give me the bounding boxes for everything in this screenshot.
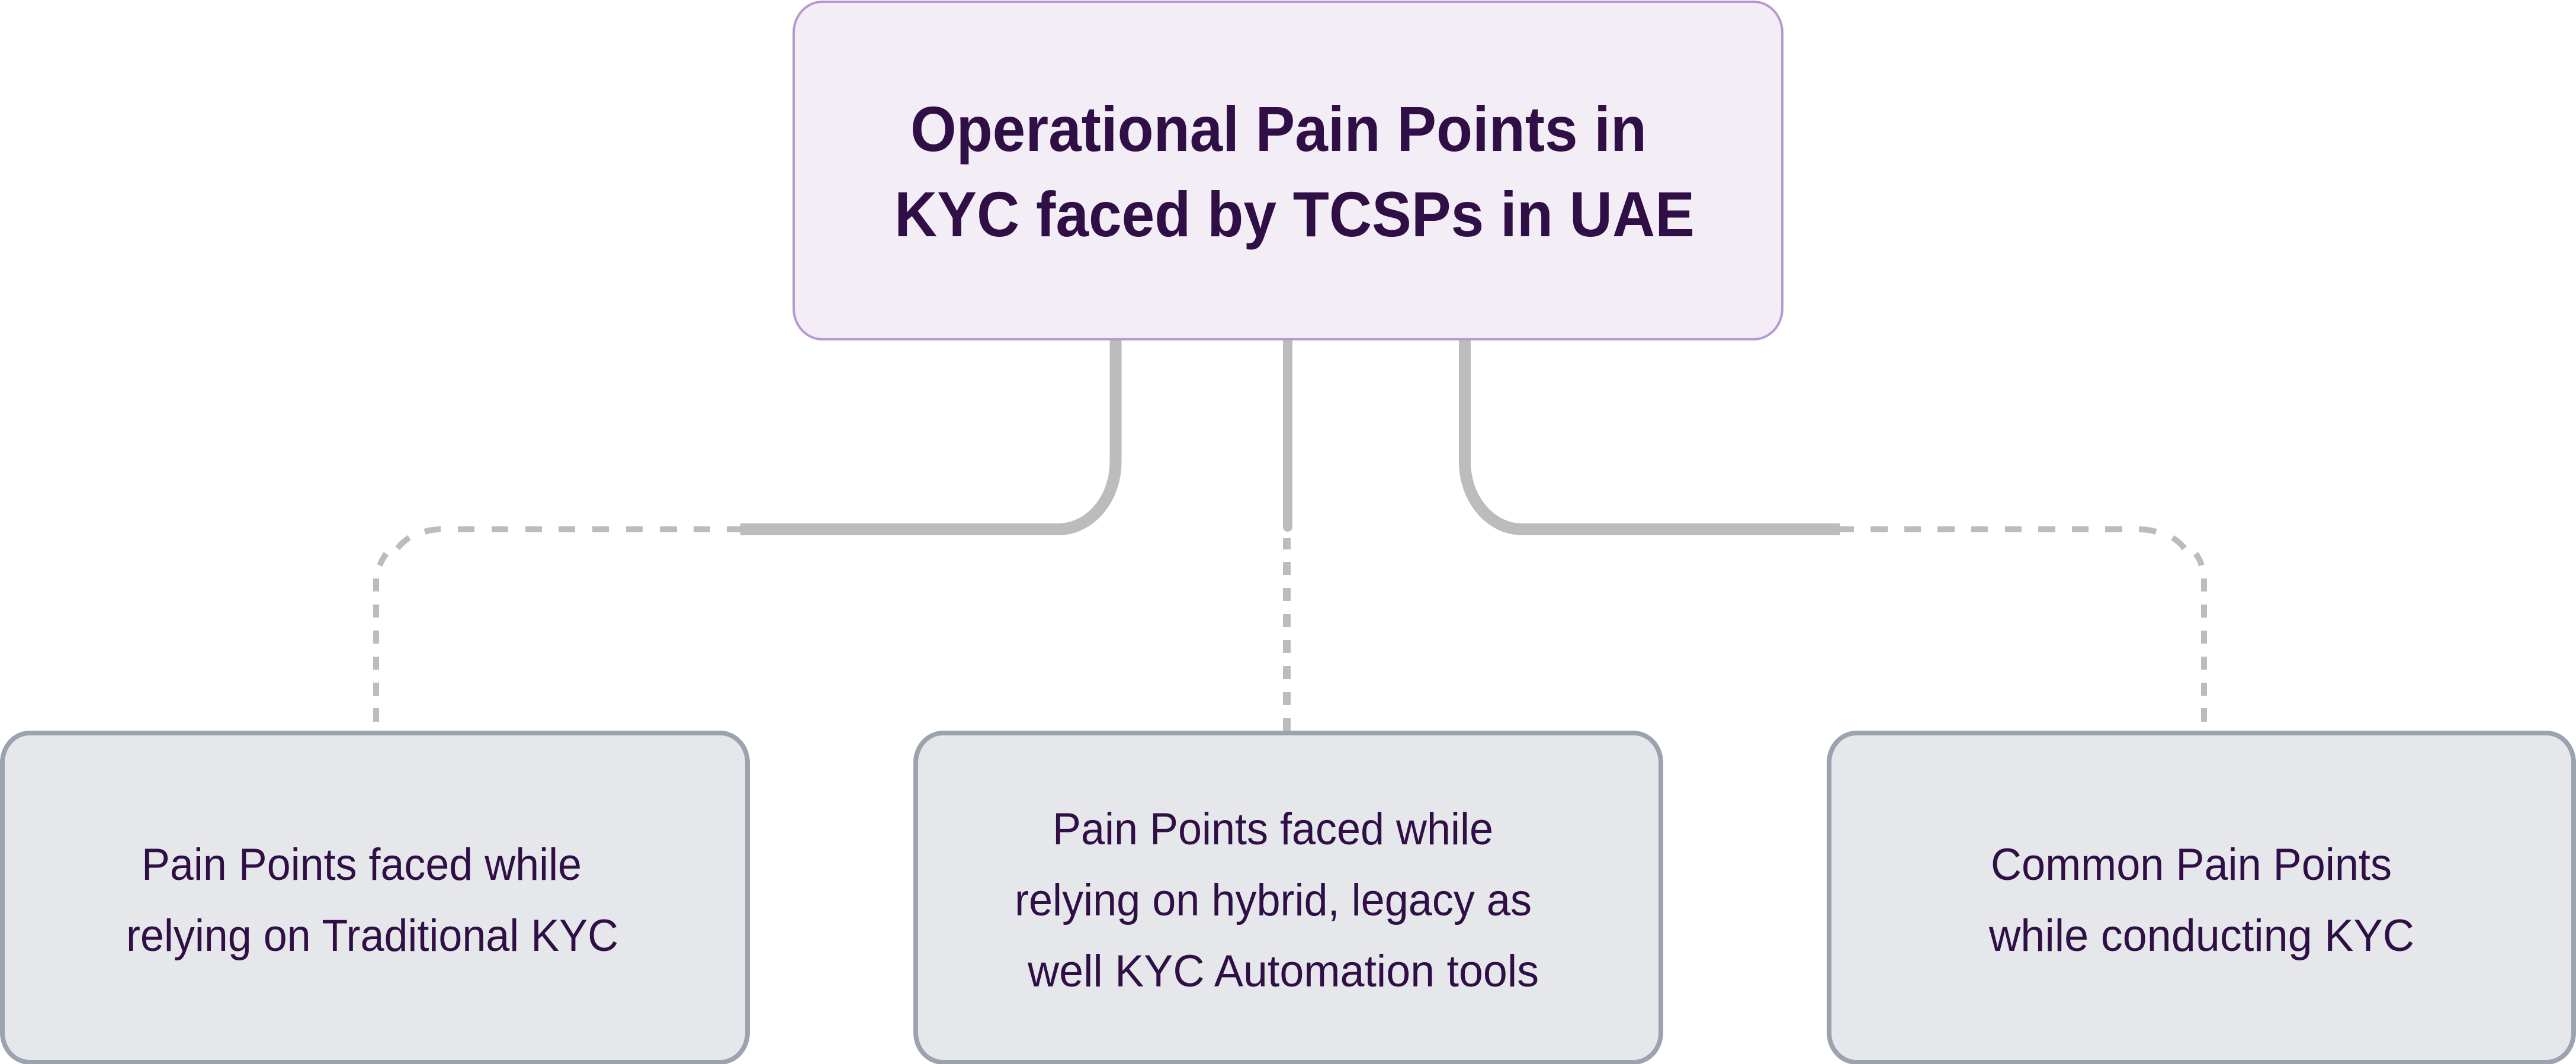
text block: hybrid and automation label	[1015, 804, 1539, 997]
text block: common pain points label	[1988, 840, 2414, 961]
text block: common pain points label: Common Pain Points	[1991, 840, 2392, 890]
panel: hybrid and automation tools box	[916, 733, 1661, 1062]
heading: title text: KYC faced by TCSPs in UAE	[894, 178, 1695, 250]
heading: title text: Operational Pain Points in	[910, 93, 1647, 165]
text block: traditional KYC label: Pain Points faced while	[142, 840, 582, 890]
connector: left branch solid	[740, 337, 1116, 529]
panel: traditional KYC box	[2, 733, 748, 1062]
text block: hybrid and automation label: Pain Points faced while	[1053, 804, 1493, 854]
text block: traditional KYC label	[126, 840, 618, 961]
connector: right branch dashed	[1840, 529, 2204, 722]
connector: right branch solid	[1465, 337, 1840, 529]
text block: common pain points label: while conducting KYC	[1988, 911, 2414, 961]
connector: left branch dashed	[376, 529, 740, 722]
heading: title text	[894, 93, 1695, 250]
connector: centre branch dashed	[1283, 538, 1291, 731]
connector: centre branch solid	[1283, 337, 1292, 527]
panel: title box	[794, 2, 1782, 339]
text block: traditional KYC label: relying on Traditional KYC	[126, 911, 618, 961]
text block: hybrid and automation label: relying on hybrid, legacy as	[1015, 875, 1532, 925]
text block: hybrid and automation label: well KYC Automation tools	[1027, 946, 1539, 997]
panel: common pain points box	[1829, 733, 2574, 1062]
